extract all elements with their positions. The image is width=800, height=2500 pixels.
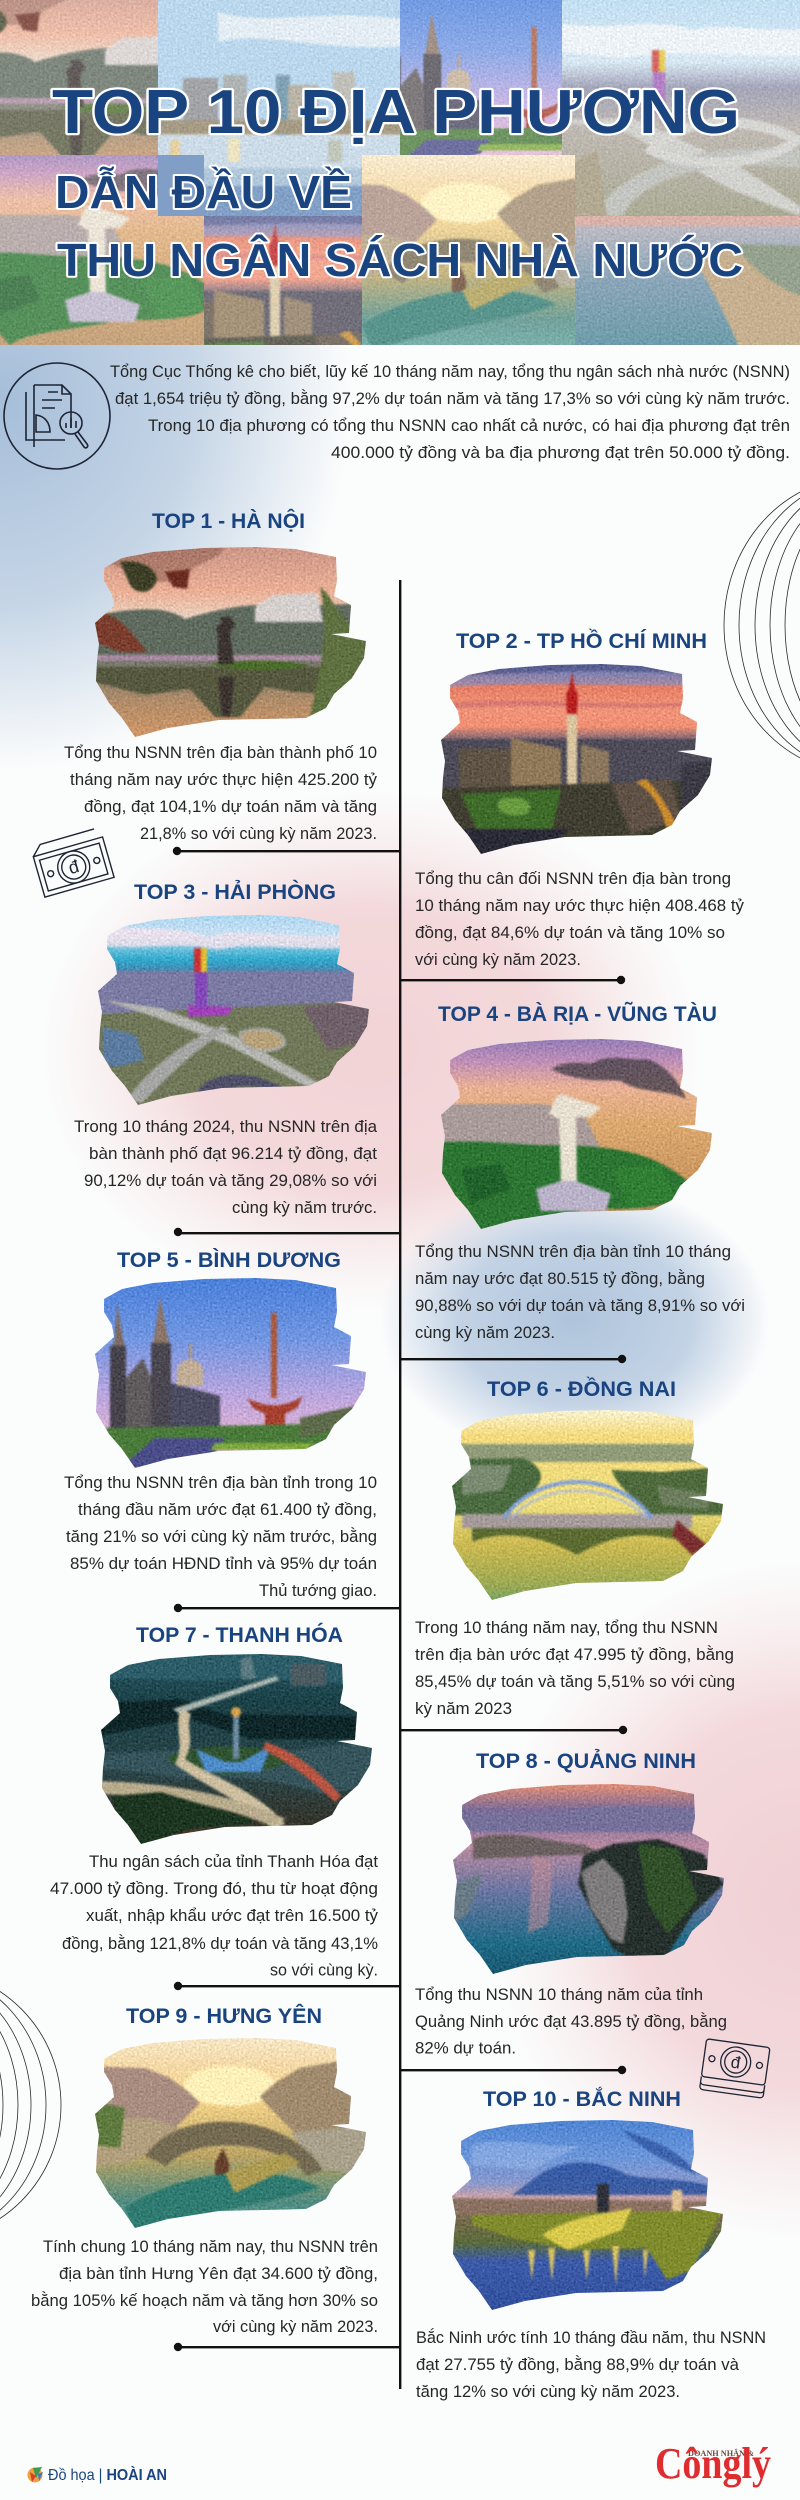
description: tăng 21% so với cùng kỳ năm trước, bằng <box>66 1527 377 1546</box>
description <box>415 1618 735 1718</box>
connector 9 <box>174 2343 400 2351</box>
photo <box>441 664 712 854</box>
intro text: Trong 10 địa phương có tổng thu NSNN cao nhất cả nước, có hai địa phương đạt trên <box>148 416 790 435</box>
decorative arcs bottom left <box>0 1969 61 2241</box>
photo <box>98 915 369 1105</box>
icon: banknote left: đ <box>66 856 81 878</box>
description: tháng đầu năm ước đạt 61.400 tỷ đồng, <box>78 1500 377 1519</box>
description: Tổng thu NSNN trên địa bàn tỉnh 10 tháng <box>415 1242 731 1261</box>
photo <box>452 1410 723 1600</box>
photo <box>95 547 366 737</box>
description: Tính chung 10 tháng năm nay, thu NSNN trên <box>43 2237 378 2256</box>
logo: Doanh nhân & Công lý: Cônglý <box>655 2439 771 2488</box>
description: Thủ tướng giao. <box>259 1581 377 1600</box>
intro text <box>110 362 790 462</box>
photo <box>453 1784 724 1974</box>
description: xuất, nhập khẩu ước đạt trên 16.500 tỷ <box>86 1906 378 1925</box>
connector 4 <box>400 1355 626 1363</box>
heading: TOP 6 - ĐỒNG NAI <box>487 1377 676 1401</box>
connector 2 <box>400 976 625 984</box>
description: Tổng thu NSNN 10 tháng năm của tỉnh <box>415 1985 703 2004</box>
title: THU NGÂN SÁCH NHÀ NƯỚC <box>57 234 743 286</box>
heading: TOP 3 - HẢI PHÒNG <box>134 880 336 904</box>
description: với cùng kỳ năm 2023. <box>213 2317 378 2336</box>
description: bằng 105% kế hoạch năm và tăng hơn 30% so <box>31 2291 378 2310</box>
description <box>415 1242 745 1342</box>
description: Trong 10 tháng 2024, thu NSNN trên địa <box>74 1117 378 1136</box>
description: 10 tháng năm nay ước thực hiện 408.468 tỷ <box>415 896 744 915</box>
description <box>64 743 377 843</box>
description: cùng kỳ năm trước. <box>232 1198 377 1217</box>
description <box>50 1852 378 1980</box>
heading: TOP 5 - BÌNH DƯƠNG <box>117 1249 341 1272</box>
heading: TOP 8 - QUẢNG NINH <box>476 1750 696 1773</box>
connector 6 <box>400 1726 627 1734</box>
intro text: Tổng Cục Thống kê cho biết, lũy kế 10 tháng năm nay, tổng thu ngân sách nhà nước (NSNN) <box>110 362 790 381</box>
connector 1 <box>173 847 400 855</box>
description: Tổng thu cân đối NSNN trên địa bàn trong <box>415 869 731 888</box>
panel: top 3 Hải Phòng <box>74 880 389 1217</box>
heading: TOP 4 - BÀ RỊA - VŨNG TÀU <box>438 1002 717 1026</box>
panel: top 2 TP Hồ Chí Minh <box>415 629 744 969</box>
description <box>415 869 744 969</box>
icon: palette <box>28 2467 43 2482</box>
panel: top 10 Bắc Ninh <box>416 2087 766 2401</box>
intro text: đạt 1,654 triệu tỷ đồng, bằng 97,2% dự toán năm và tăng 17,3% so với cùng kỳ năm trước. <box>115 389 790 408</box>
description: so với cùng kỳ. <box>270 1960 378 1980</box>
description: 82% dự toán. <box>415 2038 516 2058</box>
description <box>31 2237 378 2336</box>
footer credit <box>28 2465 167 2484</box>
header photo collage <box>0 0 800 426</box>
description: Tổng thu NSNN trên địa bàn tỉnh trong 10 <box>64 1473 377 1492</box>
description: tăng 12% so với cùng kỳ năm 2023. <box>416 2382 680 2401</box>
description: đạt 27.755 tỷ đồng, bằng 88,9% dự toán và <box>416 2355 740 2374</box>
description: 21,8% so với cùng kỳ năm 2023. <box>140 824 377 843</box>
connector 7 <box>174 1982 400 1990</box>
photo <box>452 2120 723 2310</box>
heading: TOP 2 - TP HỒ CHÍ MINH <box>456 629 707 653</box>
icon: banknote stack right <box>700 2039 770 2098</box>
photo <box>95 2038 366 2228</box>
heading: TOP 1 - HÀ NỘI <box>152 509 305 533</box>
panel: top 5 Bình Dương <box>64 1249 386 1600</box>
description: đồng, đạt 104,1% dự toán năm và tăng <box>84 797 377 816</box>
description: đồng, bằng 121,8% dự toán và tăng 43,1% <box>62 1934 378 1953</box>
description <box>416 2328 766 2401</box>
panel: top 7 Thanh Hóa <box>50 1623 392 1980</box>
connector 3 <box>174 1228 400 1236</box>
panel: top 8 Quảng Ninh <box>415 1750 744 2058</box>
description: Quảng Ninh ước đạt 43.895 tỷ đồng, bằng <box>415 2012 727 2031</box>
description: kỳ năm 2023 <box>415 1699 512 1718</box>
icon: banknote left <box>31 827 114 897</box>
description <box>64 1473 377 1600</box>
photo <box>441 1039 712 1229</box>
panel: top 4 Bà Rịa - Vũng Tàu <box>415 1002 745 1342</box>
connector 8 <box>400 2066 626 2074</box>
description: bàn thành phố đạt 96.214 tỷ đồng, đạt <box>89 1144 377 1163</box>
icon: report with magnifier <box>4 363 110 469</box>
timeline spine <box>399 580 401 2389</box>
panel: top 6 Đồng Nai <box>415 1377 743 1718</box>
description: năm nay ước đạt 80.515 tỷ đồng, bằng <box>415 1269 705 1288</box>
description: 90,12% dự toán và tăng 29,08% so với <box>84 1171 377 1190</box>
description: cùng kỳ năm 2023. <box>415 1323 555 1342</box>
panel: top 1 Hà Nội <box>64 509 386 843</box>
description: 90,88% so với dự toán và tăng 8,91% so với <box>415 1296 745 1315</box>
panel: top 9 Hưng Yên <box>31 2004 386 2336</box>
description: 85,45% dự toán và tăng 5,51% so với cùng <box>415 1672 735 1691</box>
connector 5 <box>174 1604 400 1612</box>
icon: banknote stack right: đ <box>730 2052 742 2073</box>
heading: TOP 10 - BẮC NINH <box>483 2087 681 2111</box>
photo <box>95 1278 366 1468</box>
description: với cùng kỳ năm 2023. <box>415 950 581 969</box>
description: 85% dự toán HĐND tỉnh và 95% dự toán <box>70 1554 377 1573</box>
heading: TOP 9 - HƯNG YÊN <box>126 2004 322 2028</box>
description: Tổng thu NSNN trên địa bàn thành phố 10 <box>64 743 377 762</box>
description: tháng năm nay ước thực hiện 425.200 tỷ <box>70 770 377 789</box>
title: TOP 10 ĐỊA PHƯƠNG <box>52 78 740 147</box>
description: Bắc Ninh ước tính 10 tháng đầu năm, thu NSNN <box>416 2328 766 2347</box>
description: trên địa bàn ước đạt 47.995 tỷ đồng, bằng <box>415 1645 734 1664</box>
title: DẪN ĐẦU VỀ <box>55 166 352 218</box>
credit text: Đồ họa | HOÀI AN <box>48 2465 167 2484</box>
description <box>74 1117 378 1217</box>
description: địa bàn tỉnh Hưng Yên đạt 34.600 tỷ đồng, <box>59 2264 378 2283</box>
description: 47.000 tỷ đồng. Trong đó, thu từ hoạt động <box>50 1879 378 1898</box>
description <box>415 1985 727 2058</box>
description: đồng, đạt 84,6% dự toán và tăng 10% so <box>415 923 725 942</box>
description: Thu ngân sách của tỉnh Thanh Hóa đạt <box>89 1852 378 1871</box>
intro text: 400.000 tỷ đồng và ba địa phương đạt trên 50.000 tỷ đồng. <box>331 443 790 462</box>
description: Trong 10 tháng năm nay, tổng thu NSNN <box>415 1618 718 1637</box>
title <box>52 78 743 286</box>
heading: TOP 7 - THANH HÓA <box>136 1623 343 1647</box>
photo <box>101 1654 372 1844</box>
decorative arcs top right <box>724 477 800 773</box>
logo: Doanh nhân & Công lý: DOANH NHÂN & <box>688 2448 754 2458</box>
